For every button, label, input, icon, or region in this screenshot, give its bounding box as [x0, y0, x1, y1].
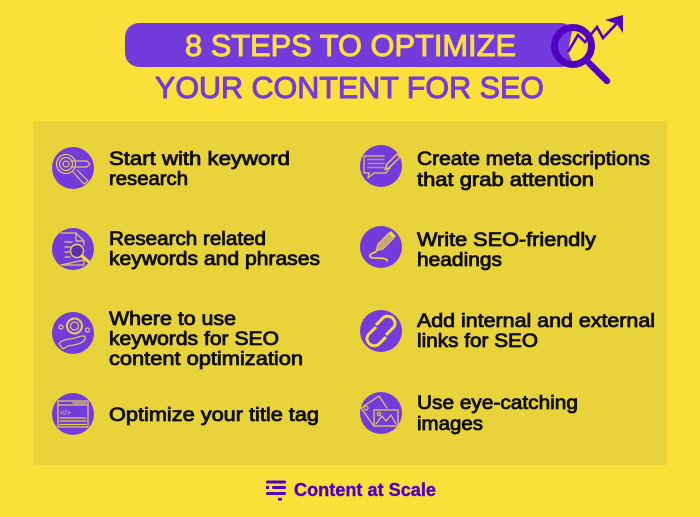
step 3: where to use keywords [52, 308, 303, 370]
step text [417, 310, 655, 352]
step 6: headings [360, 226, 596, 271]
step text: Add internal and external [417, 310, 655, 332]
step text: images [417, 413, 483, 435]
icon: logo lines [266, 480, 286, 500]
icon: browser code window [52, 393, 94, 435]
title line two: YOUR CONTENT FOR SEO [155, 70, 544, 105]
icon: chain link [360, 310, 402, 352]
step text [109, 228, 320, 270]
icon: speech bubble with pen [360, 145, 402, 187]
step text: Use eye-catching [417, 392, 578, 414]
step text: links for SEO [417, 330, 538, 352]
step text: research [109, 168, 188, 190]
brand logo [266, 480, 436, 500]
step text [417, 148, 650, 191]
step text [109, 148, 290, 190]
step text: Write SEO-friendly [417, 229, 596, 251]
panel: steps [33, 121, 667, 465]
step 5: meta descriptions [360, 145, 650, 191]
step text: Research related [109, 228, 266, 250]
icon: stacked pictures [360, 392, 402, 434]
step text: that grab attention [417, 169, 594, 191]
icon: pencil with squiggle [360, 226, 402, 268]
step 2: related keywords [52, 228, 320, 270]
step text: content optimization [109, 348, 303, 370]
step text: Optimize your title tag [109, 404, 319, 426]
step text [417, 392, 578, 435]
icon: document with magnifier [52, 228, 94, 270]
icon: hand holding gear [52, 312, 94, 354]
step text: Start with keyword [109, 148, 290, 170]
step text [109, 308, 303, 370]
brand name: Content at Scale [294, 480, 436, 500]
step 4: title tag [52, 393, 319, 435]
title banner pill [125, 23, 575, 67]
step text: headings [417, 249, 502, 271]
icon: browser code window: </> [60, 408, 71, 417]
step 1: keyword research [52, 147, 290, 190]
step text: keywords and phrases [109, 248, 320, 270]
icon: target with key [52, 147, 94, 189]
icon: magnifier with rising arrow [554, 15, 623, 81]
step 7: links [360, 310, 655, 352]
step text: keywords for SEO [109, 328, 279, 350]
step text: Where to use [109, 308, 236, 330]
step text [417, 229, 596, 271]
title line one: 8 STEPS TO OPTIMIZE [185, 28, 516, 63]
step 8: images [360, 392, 578, 435]
step text: Create meta descriptions [417, 148, 650, 170]
